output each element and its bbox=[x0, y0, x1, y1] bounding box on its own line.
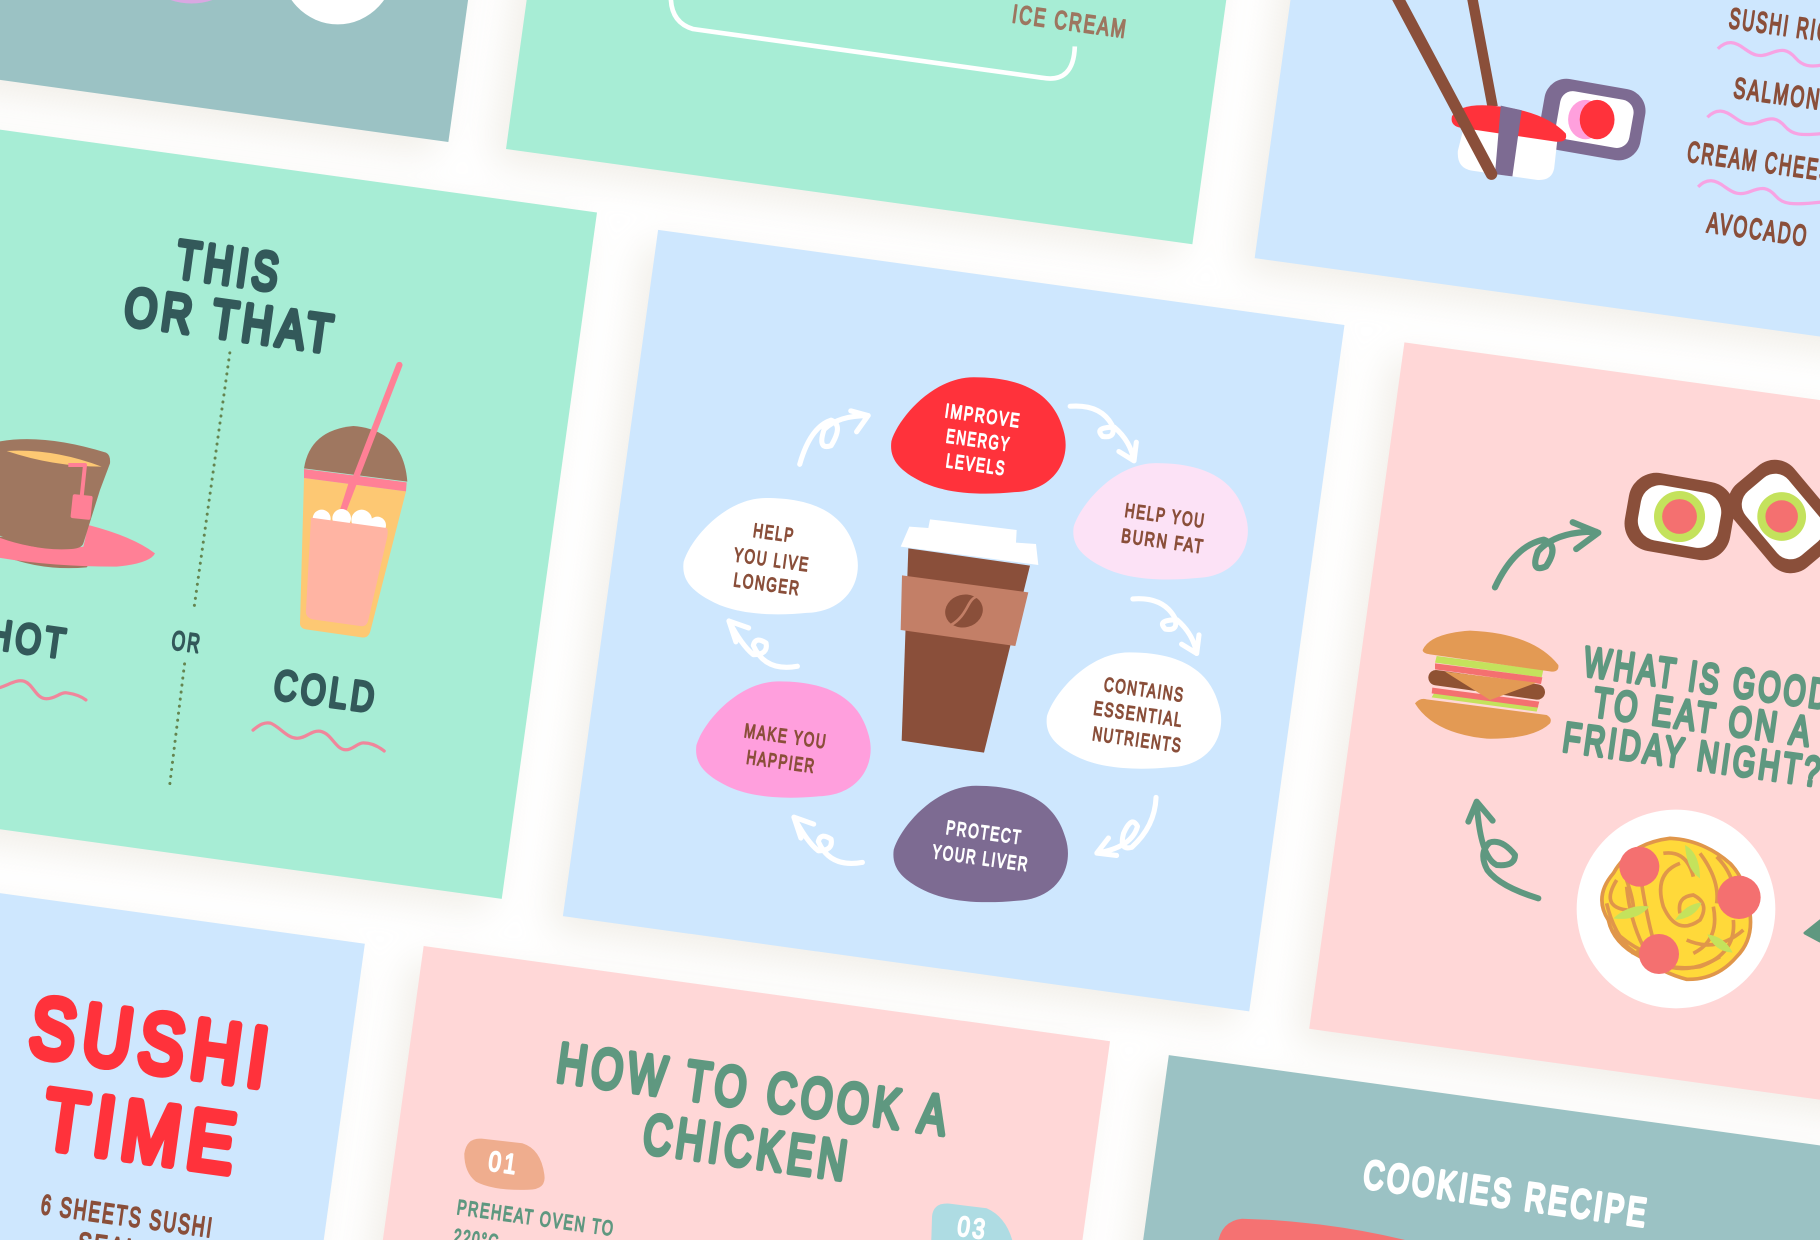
title: sushi time: TIME bbox=[38, 1071, 249, 1192]
blob: protect your liver: PROTECT bbox=[945, 817, 1024, 849]
icon: partial white and lilac shapes bbox=[164, 0, 396, 24]
arrow: pasta to burger bbox=[1468, 802, 1538, 898]
blob: protect your liver bbox=[893, 786, 1068, 902]
blob: make you happier: HAPPIER bbox=[745, 747, 817, 778]
icon: coffee cup bbox=[901, 519, 1038, 753]
blob: improve energy levels: LEVELS bbox=[945, 450, 1007, 480]
red label shape bbox=[1218, 1219, 1422, 1240]
icon: burger bbox=[1415, 631, 1558, 739]
blob: help you burn fat bbox=[1073, 463, 1248, 580]
blob: help you live longer: LONGER bbox=[732, 569, 802, 600]
blob: protect your liver: YOUR LIVER bbox=[931, 841, 1030, 876]
title: this or that bbox=[121, 230, 341, 365]
arrow: burn fat to nutrients bbox=[1133, 599, 1199, 653]
arrow: liver to happier bbox=[794, 817, 862, 863]
blob: contains essential nutrients bbox=[1047, 652, 1221, 769]
title: sushi time bbox=[25, 979, 281, 1192]
step 01 badge bbox=[464, 1139, 545, 1190]
arrow: happier to longer bbox=[729, 621, 797, 667]
text: ice cream: ICE CREAM bbox=[1011, 0, 1129, 44]
blob: help you live longer: HELP bbox=[752, 520, 796, 547]
icon: sushi with chopsticks bbox=[1396, 0, 1649, 180]
blob: help you burn fat: BURN FAT bbox=[1120, 525, 1206, 558]
step 03 badge bbox=[931, 1204, 1014, 1240]
title: how to cook a chicken: CHICKEN bbox=[640, 1102, 855, 1193]
panel: top left slate card bbox=[0, 0, 544, 142]
white outline box bbox=[671, 0, 1075, 79]
title: sushi time: SUSHI bbox=[25, 979, 281, 1106]
blob: help you live longer bbox=[683, 498, 858, 614]
blob: improve energy levels: IMPROVE bbox=[944, 400, 1022, 433]
panel: top right sushi card bbox=[1255, 0, 1820, 353]
label: hot bbox=[0, 610, 86, 700]
label: cold: COLD bbox=[271, 661, 381, 722]
label: cold bbox=[253, 661, 384, 751]
arrow: nutrients to liver bbox=[1097, 797, 1156, 855]
arrow: partial head at right edge bbox=[1805, 921, 1820, 941]
arrow: to sushi rolls bbox=[1495, 522, 1598, 587]
icon: spaghetti plate bbox=[1577, 810, 1775, 1008]
blob: make you happier: MAKE YOU bbox=[743, 720, 829, 753]
icon: cold drink bbox=[300, 365, 407, 638]
heading: what is good to eat on a friday night bbox=[1560, 638, 1820, 796]
title: how to cook a chicken bbox=[553, 1031, 955, 1193]
panel: friday night food card bbox=[1309, 342, 1820, 1124]
blob: help you burn fat: HELP YOU bbox=[1123, 500, 1207, 533]
arrow: help longer to energy bbox=[800, 411, 868, 464]
panel: how to cook a chicken card bbox=[328, 946, 1110, 1240]
title: this or that: THIS bbox=[173, 230, 287, 303]
text: ingredients bbox=[39, 1189, 216, 1240]
blob: improve energy levels bbox=[891, 377, 1066, 494]
blob: make you happier bbox=[696, 681, 871, 798]
divider: dotted line with or: OR bbox=[170, 625, 204, 659]
panel: sushi time card bbox=[0, 848, 365, 1240]
panel: coffee benefits card bbox=[563, 230, 1344, 1011]
text: step 01 bbox=[452, 1196, 616, 1240]
ingredient list bbox=[1685, 3, 1820, 253]
blob: help you live longer: YOU LIVE bbox=[732, 544, 811, 577]
blob: contains essential nutrients: CONTAINS bbox=[1103, 674, 1186, 707]
panel: cookies recipe card bbox=[1074, 1055, 1820, 1240]
icon: sushi rolls bbox=[1620, 449, 1820, 584]
icon: hot tea cup bbox=[0, 439, 155, 568]
step 01 badge: 01 bbox=[487, 1145, 521, 1180]
blob: contains essential nutrients: NUTRIENTS bbox=[1091, 723, 1184, 757]
panel: this or that card bbox=[0, 117, 597, 899]
panel: top middle ice cream card bbox=[506, 0, 1288, 244]
blob: contains essential nutrients: ESSENTIAL bbox=[1092, 698, 1185, 732]
title: how to cook a chicken: HOW TO COOK A bbox=[553, 1031, 955, 1147]
blob: improve energy levels: ENERGY bbox=[945, 425, 1012, 456]
divider: dotted line with or bbox=[169, 353, 230, 787]
arrow: energy to burn fat bbox=[1070, 406, 1136, 461]
title: this or that: OR THAT bbox=[121, 278, 341, 365]
